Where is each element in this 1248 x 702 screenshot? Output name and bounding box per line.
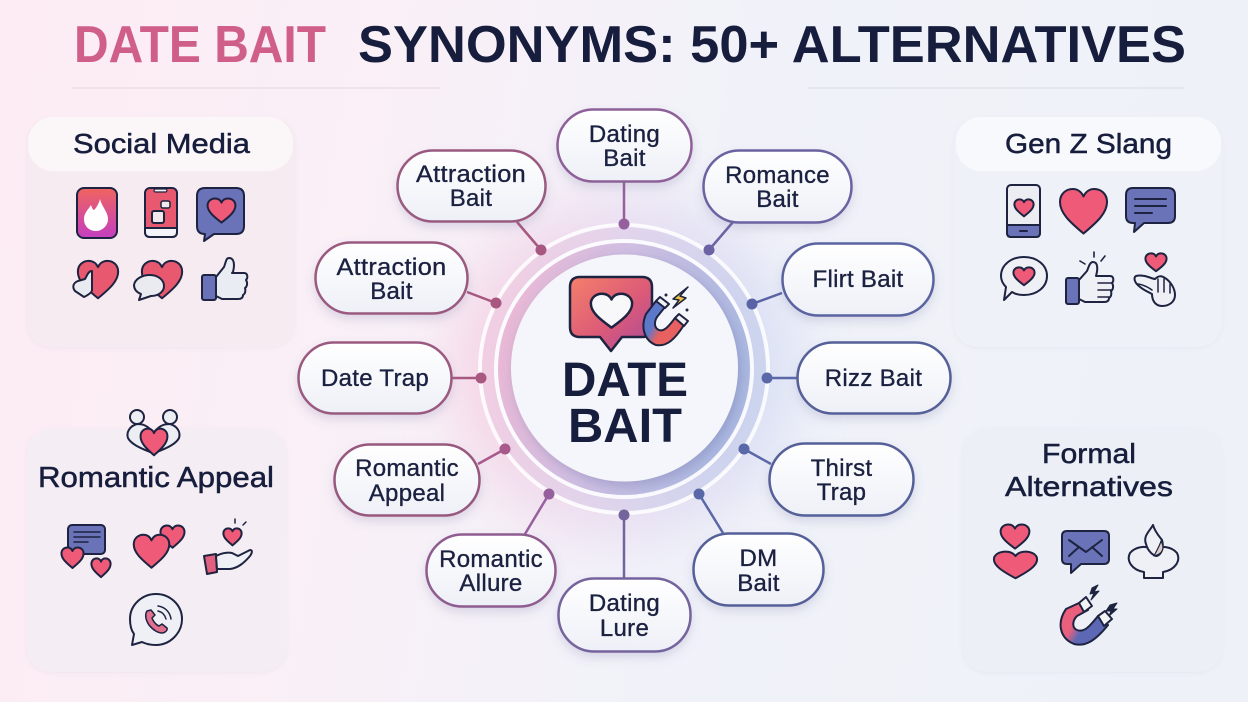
icon: large heart: [1060, 189, 1107, 234]
icon: thumbs up sparkle: [1066, 252, 1113, 304]
node: Rizz Bait: Rizz Bait: [825, 365, 922, 392]
icon: mail bubble: [1062, 531, 1109, 573]
icon: message bubble: [1126, 188, 1175, 232]
icon: chat with hearts: [61, 525, 111, 577]
title: DATE BAIT: [74, 16, 326, 74]
node: Romance Bait: Bait: [756, 186, 799, 213]
hub label: BAIT: [568, 400, 682, 453]
node: Romantic Allure: Romantic: [439, 546, 543, 573]
node: Romantic Appeal: Romantic: [355, 455, 459, 482]
icon: phone speech bubble: [130, 594, 182, 645]
title: SYNONYMS: 50+ ALTERNATIVES: [358, 16, 1186, 74]
node: Flirt Bait: [746, 244, 934, 316]
node: Dating Lure: [558, 510, 690, 652]
node: Dating Bait: Bait: [603, 145, 646, 172]
node: Thirst Trap: [738, 444, 914, 516]
icon: thumbs up: [202, 258, 247, 300]
node: DM Bait: Bait: [737, 570, 780, 597]
node: Attraction Bait upper: Bait: [450, 185, 492, 212]
heading: romantic appeal: Romantic Appeal: [38, 462, 274, 494]
node: Attraction Bait lower: Attraction: [336, 254, 446, 281]
node: Romance Bait: Romance: [725, 162, 830, 189]
node: Romantic Appeal: Appeal: [369, 480, 445, 507]
icon: magnet with bolt: [643, 287, 688, 345]
heading: formal alternatives: [1005, 438, 1173, 502]
node: Rizz Bait: [762, 342, 950, 414]
node: Dating Lure: Lure: [600, 615, 649, 642]
node: Romance Bait: [704, 150, 852, 256]
icon: lotus bowl: [1129, 525, 1178, 578]
icon: phone with chat: [145, 188, 177, 237]
node: Attraction Bait lower: [316, 242, 502, 314]
icon: stacked hearts: [994, 525, 1037, 578]
panel: gen z slang: [954, 117, 1222, 347]
node: Date Trap: Date Trap: [321, 365, 429, 392]
node: Thirst Trap: Thirst: [811, 455, 872, 482]
node: Dating Bait: Dating: [589, 121, 660, 148]
icon: heart and speech: [134, 261, 182, 300]
central hub: [454, 199, 794, 539]
node: Thirst Trap: Trap: [817, 479, 866, 506]
heading: gen z slang: Gen Z Slang: [1005, 128, 1172, 159]
node: Date Trap: [298, 342, 486, 414]
heading: formal alternatives: Alternatives: [1005, 471, 1173, 502]
icon: two hearts: [134, 526, 184, 568]
hub label: [562, 354, 688, 453]
panel: formal alternatives: [963, 429, 1222, 672]
node: Romantic Allure: Allure: [459, 570, 523, 597]
panel: social media: [27, 117, 295, 347]
icon: embracing figures with heart: [127, 410, 180, 455]
node: Dating Lure: Dating: [589, 590, 660, 617]
node: Dating Bait: [558, 110, 692, 230]
icon: heart speech bubble: [570, 277, 652, 351]
icon: heart and thumb: [73, 261, 118, 298]
node: Flirt Bait: Flirt Bait: [812, 266, 904, 293]
icon: horseshoe magnet: [1061, 585, 1117, 645]
node: DM Bait: [694, 488, 824, 606]
icon: hand offering heart: [204, 519, 252, 574]
heading: formal alternatives: Formal: [1042, 438, 1136, 469]
node: Attraction Bait upper: [398, 150, 546, 256]
panel: romantic appeal: [27, 410, 286, 672]
icon: phone with heart: [1007, 185, 1040, 237]
node: DM Bait: DM: [740, 545, 777, 572]
node: Attraction Bait upper: Attraction: [416, 161, 526, 188]
node: Attraction Bait lower: Bait: [370, 278, 413, 305]
node: Romantic Allure: [426, 488, 556, 606]
icon: heart speech oval: [1001, 257, 1047, 300]
icon: flame app: [77, 188, 117, 238]
icon: heart chat bubble: [197, 188, 244, 241]
hub label: DATE: [562, 354, 688, 407]
node: Romantic Appeal: [334, 444, 510, 516]
heading: social media: Social Media: [73, 128, 250, 159]
icon: finger heart hand: [1134, 253, 1175, 306]
